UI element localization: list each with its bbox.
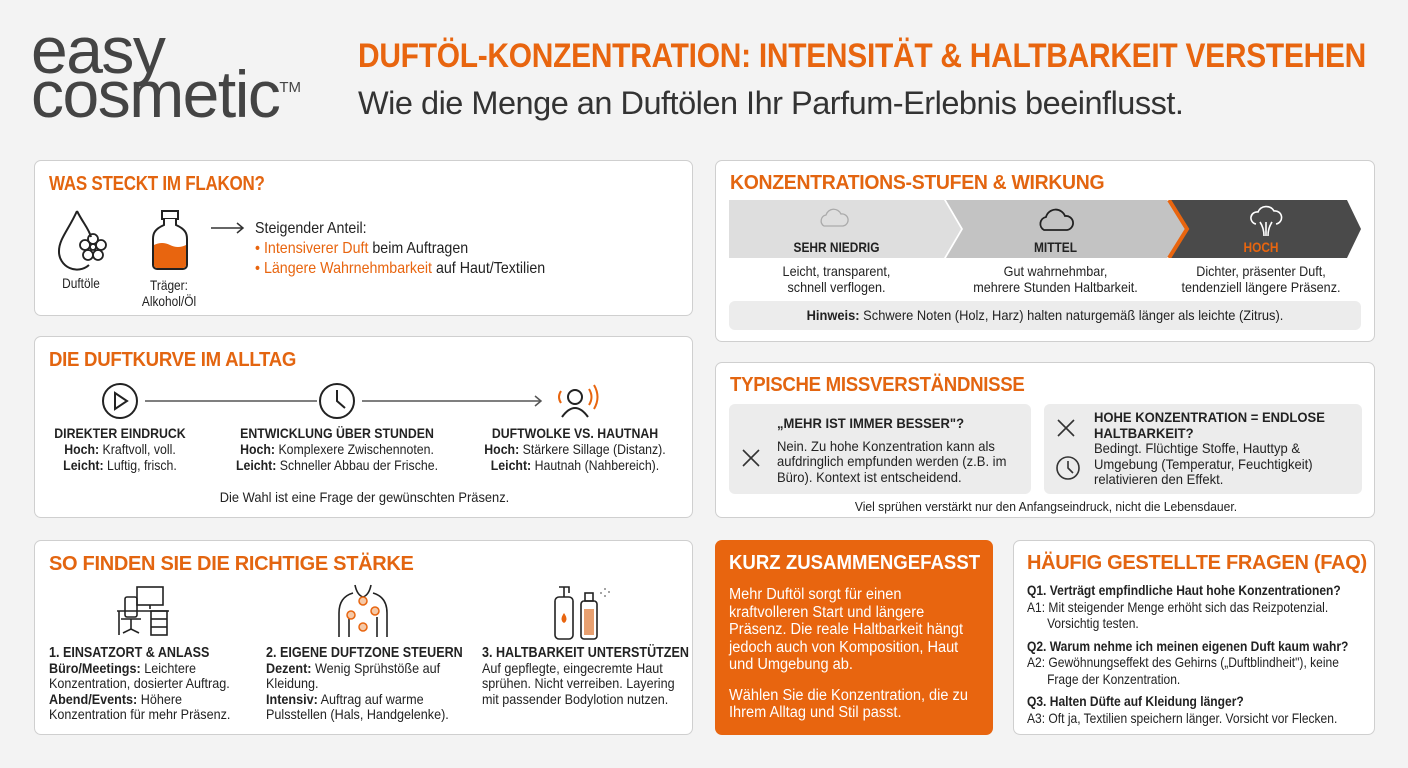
panel: missverständnisse: [715, 362, 1375, 518]
desc: sehr niedrig: Leicht, transparent,: [783, 263, 890, 279]
text: steigender anteil: Steigender Anteil:: [255, 220, 367, 237]
heading: KONZENTRATIONS-STUFEN & WIRKUNG: [730, 172, 1104, 194]
step 1: [49, 644, 230, 722]
myth 2: [1044, 404, 1362, 494]
step: entwicklung: Hoch: Komplexere Zwischennoten.: [240, 441, 434, 457]
step 1: Konzentration, dosierter Auftrag.: [49, 675, 230, 691]
summary text: und Umgebung ab. Wählen Sie die Konzentration, die zu: [729, 656, 968, 704]
icon: bottle: [152, 210, 188, 270]
step 2: Dezent: Wenig Sprühstöße auf: [266, 660, 440, 676]
label: träger: [142, 277, 196, 309]
desc: mittel: [973, 263, 1138, 295]
summary text: Präsenz. Die reale Haltbarkeit hängt: [729, 621, 963, 638]
text: steigender anteil: • Längere Wahrnehmbarkeit auf Haut/Textilien: [255, 260, 545, 277]
heading: KURZ ZUSAMMENGEFASST: [729, 552, 980, 574]
timeline: [102, 383, 598, 419]
text: steigender anteil: • Intensiverer Duft beim Auftragen: [255, 240, 468, 257]
step: direkter eindruck: DIREKTER EINDRUCK: [54, 425, 186, 441]
heading: SO FINDEN SIE DIE RICHTIGE STÄRKE: [49, 553, 414, 575]
step 3: 3. HALTBARKEIT UNTERSTÜTZEN: [482, 644, 689, 661]
step: direkter eindruck: Leicht: Luftig, frisch.: [63, 457, 177, 473]
step: direkter eindruck: Hoch: Kraftvoll, voll.: [64, 441, 176, 457]
myth 2: HALTBARKEIT?: [1094, 424, 1194, 440]
logo: cosmeticTM: [31, 57, 301, 131]
myth 1: Büro). Kontext ist entscheidend.: [777, 468, 962, 484]
icon: lotion and spray: [554, 586, 610, 640]
step: entwicklung: [236, 425, 438, 473]
faq items: A1: Mit steigender Menge erhöht sich das Reizpotenzial.: [1027, 598, 1328, 614]
step 2: 2. EIGENE DUFTZONE STEUERN: [266, 644, 463, 661]
chevron scale: [729, 200, 1361, 258]
step: duftwolke: DUFTWOLKE VS. HAUTNAH: [492, 425, 658, 441]
desc: mittel: Gut wahrnehmbar,: [1004, 263, 1107, 279]
label: hoch: HOCH: [1243, 239, 1279, 255]
panel: duftkurve: [34, 336, 693, 518]
summary text: Ihrem Alltag und Stil passt.: [729, 704, 902, 721]
step: duftwolke: Hoch: Stärkere Sillage (Distanz).: [484, 441, 666, 457]
desc: hoch: Dichter, präsenter Duft,: [1196, 263, 1326, 279]
step: direkter eindruck: [54, 425, 186, 473]
panel: kurz zusammengefasst: [715, 540, 993, 735]
summary text: Mehr Duftöl sorgt für einen: [729, 586, 902, 603]
heading: WAS STECKT IM FLAKON?: [49, 173, 265, 195]
heading: TYPISCHE MISSVERSTÄNDNISSE: [730, 374, 1025, 396]
faq items: Q1. Verträgt empfindliche Haut hohe Konzentrationen?: [1027, 582, 1341, 598]
label: mittel: MITTEL: [1034, 239, 1077, 255]
panel: was steckt im flakon: [34, 160, 693, 316]
title: DUFTÖL-KONZENTRATION: INTENSITÄT & HALTBARKEIT VERSTEHEN: [358, 37, 1366, 75]
icon: x and clock: [1056, 419, 1080, 480]
hint box: Hinweis: Schwere Noten (Holz, Harz) halten naturgemäß länger als leichte (Zitrus).: [807, 307, 1283, 323]
step 2: [266, 644, 463, 722]
step 1: 1. EINSATZORT & ANLASS: [49, 644, 209, 661]
myth 2: relativieren den Effekt.: [1094, 471, 1223, 487]
myth 1: „MEHR IST IMMER BESSER"?: [777, 415, 964, 431]
step 2: Kleidung.: [266, 675, 319, 691]
icon: desk: [117, 586, 169, 636]
panel: konzentrationsstufen: [715, 160, 1375, 342]
desc: hoch: tendenziell längere Präsenz.: [1181, 279, 1340, 295]
heading: DIE DUFTKURVE IM ALLTAG: [49, 349, 296, 371]
panel: richtige stärke: [34, 540, 693, 735]
myth 1: Nein. Zu hohe Konzentration kann als: [777, 438, 995, 454]
faq items: Frage der Konzentration. Q3. Halten Düfte auf Kleidung länger?: [1027, 670, 1244, 709]
icon: oil drop: [58, 210, 107, 271]
summary text: kraftvolleren Start und längere: [729, 604, 924, 620]
label: duftöle: Duftöle: [62, 275, 100, 291]
desc: mittel: mehrere Stunden Haltbarkeit.: [973, 279, 1138, 295]
myth 1: aufdringlich empfunden werden (z.B. im: [777, 453, 1006, 469]
faq items: A2: Gewöhnungseffekt des Gehirns („Duftblindheit"), keine: [1027, 654, 1339, 670]
arrow: [211, 222, 244, 234]
step 1: Abend/Events: Höhere: [49, 690, 182, 706]
step: duftwolke: [484, 425, 666, 473]
hint box: [729, 301, 1361, 330]
myth 2: HOHE KONZENTRATION = ENDLOSE: [1094, 409, 1325, 425]
heading: HÄUFIG GESTELLTE FRAGEN (FAQ): [1027, 552, 1367, 574]
logo: [31, 13, 301, 131]
step 2: Pulsstellen (Hals, Handgelenke).: [266, 706, 449, 722]
label: träger: Träger:: [150, 277, 188, 293]
step 3: mit passender Bodylotion nutzen.: [482, 690, 668, 706]
footer note: Die Wahl ist eine Frage der gewünschten Präsenz.: [220, 489, 509, 505]
label: träger: Alkohol/Öl: [142, 293, 196, 309]
text: steigender anteil: [255, 220, 545, 277]
summary text: [728, 586, 968, 721]
desc: sehr niedrig: [783, 263, 890, 295]
step: entwicklung: ENTWICKLUNG ÜBER STUNDEN: [240, 425, 434, 441]
step 1: Konzentration für mehr Präsenz.: [49, 706, 230, 722]
subtitle: Wie die Menge an Duftölen Ihr Parfum-Erlebnis beeinflusst.: [358, 85, 1183, 121]
faq items: Vorsichtig testen. Q2. Warum nehme ich meinen eigenen Duft kaum wahr?: [1027, 615, 1348, 654]
step 3: [482, 644, 689, 707]
icon: body pulse points: [338, 584, 388, 637]
myth 2: Umgebung (Temperatur, Feuchtigkeit): [1094, 456, 1313, 472]
faq items: [1027, 582, 1348, 726]
step 3: Auf gepflegte, eingecremte Haut: [482, 660, 663, 676]
icon: x: [742, 449, 760, 467]
logo: easy: [31, 13, 164, 87]
label: sehr niedrig: SEHR NIEDRIG: [794, 239, 879, 255]
summary text: jedoch auch von Komposition, Haut: [729, 638, 958, 656]
step: entwicklung: Leicht: Schneller Abbau der Frische.: [236, 457, 438, 473]
desc: hoch: [1181, 263, 1340, 295]
faq items: A3: Oft ja, Textilien speichern länger. Vorsicht vor Flecken.: [1027, 710, 1337, 726]
step 2: Intensiv: Auftrag auf warme: [266, 690, 424, 706]
panel: faq: [1013, 540, 1375, 735]
step 3: sprühen. Nicht verreiben. Layering: [482, 675, 675, 691]
footer note: Viel sprühen verstärkt nur den Anfangseindruck, nicht die Lebensdauer.: [855, 499, 1237, 514]
myth 1: [729, 404, 1031, 494]
step: duftwolke: Leicht: Hautnah (Nahbereich).: [491, 457, 659, 473]
myth 2: Bedingt. Flüchtige Stoffe, Hauttyp &: [1094, 440, 1300, 456]
desc: sehr niedrig: schnell verflogen.: [787, 279, 886, 295]
step 1: Büro/Meetings: Leichtere: [49, 660, 196, 676]
